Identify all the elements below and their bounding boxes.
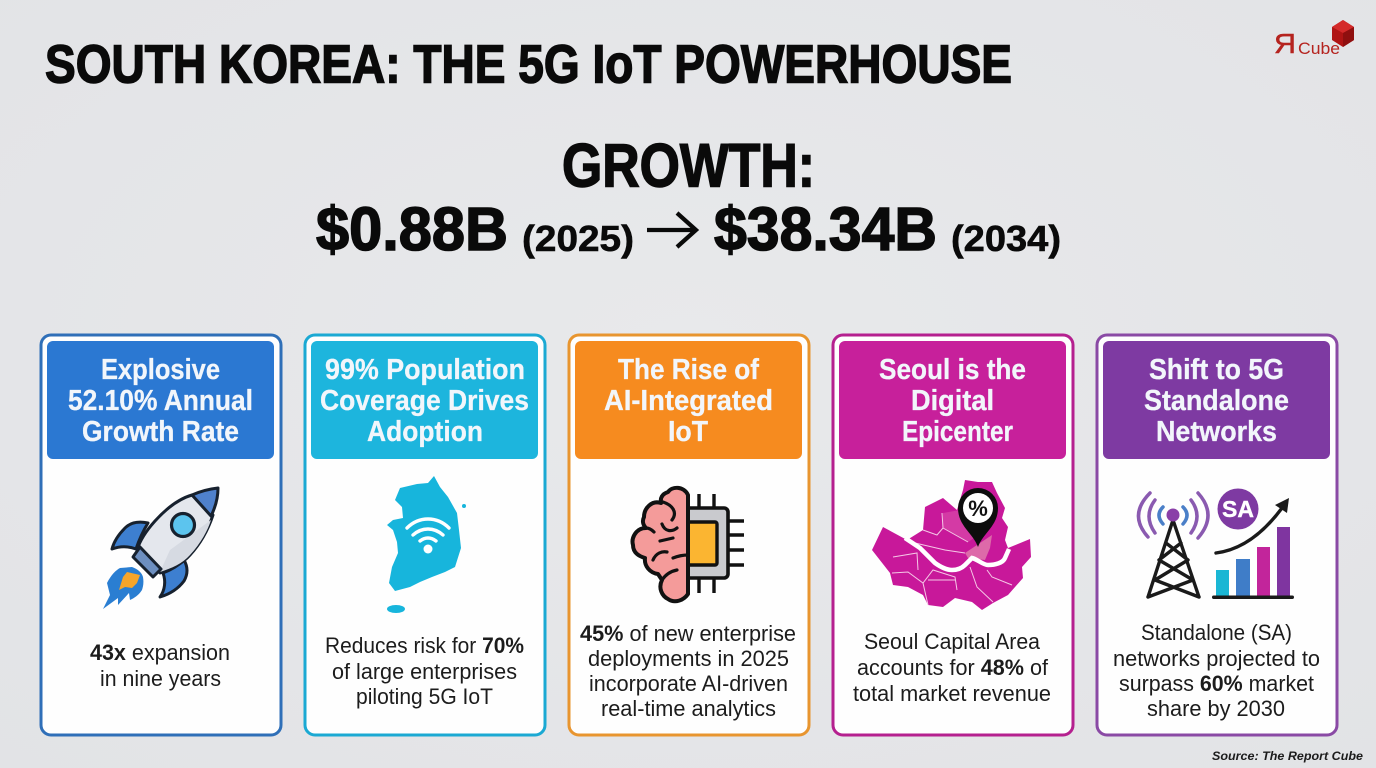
heading: seoul epicenter: Epicenter	[902, 416, 1013, 448]
heading: seoul epicenter	[839, 341, 1066, 459]
text: seoul epicenter: total market revenue	[853, 681, 1051, 706]
text: explosive growth	[90, 640, 230, 691]
text: AI-integrated IoT: 45% of new enterprise	[580, 621, 796, 646]
icon: rocket	[103, 488, 218, 609]
text: AI-integrated IoT: deployments in 2025	[588, 646, 789, 671]
heading: 5G standalone: Standalone	[1144, 385, 1289, 417]
icon: korea map with wifi	[387, 476, 466, 613]
text: seoul epicenter: accounts for 48% of	[857, 655, 1049, 680]
text: explosive growth: in nine years	[100, 666, 221, 691]
logo: RCube: Я	[1274, 28, 1296, 59]
heading: population coverage: 99% Population	[325, 354, 525, 386]
heading: AI-integrated IoT: The Rise of	[618, 354, 759, 386]
heading: explosive growth: Growth Rate	[82, 416, 239, 448]
text: population coverage: Reduces risk for 70%	[325, 633, 524, 658]
heading: seoul epicenter: Seoul is the	[879, 354, 1026, 386]
heading: population coverage	[311, 341, 538, 459]
icon: brain with chip	[633, 488, 744, 601]
growth heading: $38.34B	[714, 195, 937, 263]
heading: 5G standalone	[1103, 341, 1330, 459]
text: population coverage: piloting 5G IoT	[356, 684, 493, 709]
logo: RCube: Cube	[1298, 39, 1340, 58]
icon: tower, SA badge and rising bars: SA	[1222, 496, 1254, 522]
growth heading: $0.88B	[316, 195, 508, 263]
text: AI-integrated IoT	[580, 621, 796, 721]
heading: AI-integrated IoT: AI-Integrated	[604, 385, 773, 417]
icon: seoul map with pin	[872, 480, 1031, 610]
growth heading: (2025)	[522, 218, 634, 259]
text: 5G standalone: surpass 60% market	[1119, 671, 1314, 696]
text: AI-integrated IoT: incorporate AI-driven	[589, 671, 788, 696]
icon: seoul map with pin: %	[968, 496, 988, 521]
heading: explosive growth: Explosive	[101, 354, 220, 386]
text: 5G standalone: networks projected to	[1113, 646, 1320, 671]
growth heading	[316, 132, 1061, 263]
text: population coverage	[325, 633, 524, 709]
panel: population coverage	[305, 335, 545, 735]
icon: tower, SA badge and rising bars	[1138, 488, 1294, 599]
text: seoul epicenter: Seoul Capital Area	[864, 629, 1041, 654]
heading: explosive growth	[47, 341, 274, 459]
text: 5G standalone	[1113, 620, 1320, 721]
arrow: growth	[647, 213, 696, 247]
growth heading: GROWTH:	[562, 132, 815, 200]
logo: RCube	[1274, 20, 1354, 59]
panel: AI-integrated IoT	[569, 335, 809, 735]
text: 5G standalone: share by 2030	[1147, 696, 1285, 721]
text: population coverage: of large enterprises	[332, 659, 517, 684]
text: explosive growth: 43x expansion	[90, 640, 230, 665]
heading: population coverage: Adoption	[367, 416, 483, 448]
text: 5G standalone: Standalone (SA)	[1141, 620, 1292, 645]
heading: 5G standalone: Shift to 5G	[1149, 354, 1284, 386]
heading: seoul epicenter: Digital	[911, 385, 994, 417]
source note: Source: The Report Cube	[1212, 749, 1363, 763]
panel: explosive growth	[41, 335, 281, 735]
panel: 5G standalone	[1097, 335, 1337, 735]
heading: AI-integrated IoT	[575, 341, 802, 459]
growth heading: (2034)	[951, 218, 1061, 259]
heading: explosive growth: 52.10% Annual	[68, 385, 253, 417]
title: SOUTH KOREA: THE 5G IoT POWERHOUSE	[45, 34, 1012, 94]
heading: AI-integrated IoT: IoT	[668, 416, 708, 448]
panel: seoul epicenter	[833, 335, 1073, 735]
text: seoul epicenter	[853, 629, 1051, 706]
heading: population coverage: Coverage Drives	[320, 385, 529, 417]
heading: 5G standalone: Networks	[1156, 416, 1277, 448]
text: AI-integrated IoT: real-time analytics	[601, 696, 776, 721]
